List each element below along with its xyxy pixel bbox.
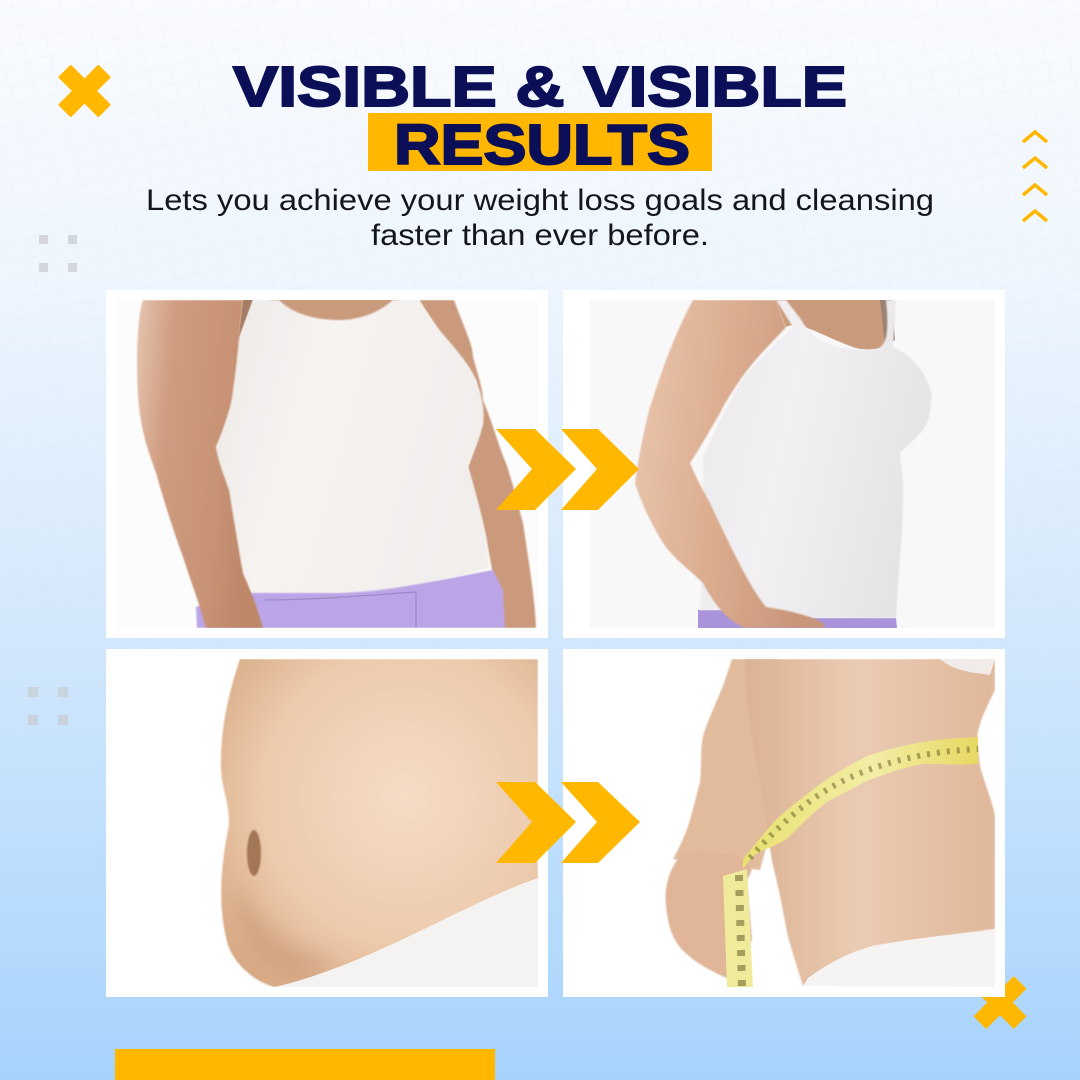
chest skin (776, 300, 892, 349)
shorts (698, 610, 897, 628)
arrow: bottom double chevron (496, 782, 640, 863)
right arm and side skin (419, 300, 536, 628)
panel: before torso (106, 290, 548, 638)
icon: chevrons top right (1023, 132, 1047, 221)
icon: grey dots lower left (28, 687, 68, 725)
icon: grey dots upper left (39, 235, 77, 272)
bottom yellow bar (115, 1049, 495, 1080)
subtitle: faster than ever before. (371, 219, 709, 252)
arm (673, 659, 790, 870)
left arm (137, 300, 263, 628)
bra (940, 659, 995, 675)
tape hanging (723, 869, 753, 987)
icon: yellow cross bottom right (960, 962, 1040, 1043)
hand (666, 852, 752, 978)
subtitle (146, 184, 934, 252)
subtitle: Lets you achieve your weight loss goals and cleansing (146, 184, 934, 217)
torso (745, 659, 995, 986)
tank top (216, 300, 489, 593)
shorts (196, 570, 505, 628)
panel: after torso (563, 290, 1005, 638)
icon: yellow cross top left (44, 51, 125, 131)
title: VISIBLE & VISIBLE (233, 55, 847, 119)
panel: before belly (106, 649, 548, 997)
panel: after waist with measuring tape (563, 649, 1005, 997)
chest skin (270, 300, 400, 321)
title highlight: results: RESULTS (394, 113, 690, 177)
tank top (700, 300, 932, 618)
left arm (635, 300, 825, 628)
arrow: top double chevron (496, 429, 639, 510)
underwear (803, 930, 995, 987)
tape band (743, 737, 978, 869)
